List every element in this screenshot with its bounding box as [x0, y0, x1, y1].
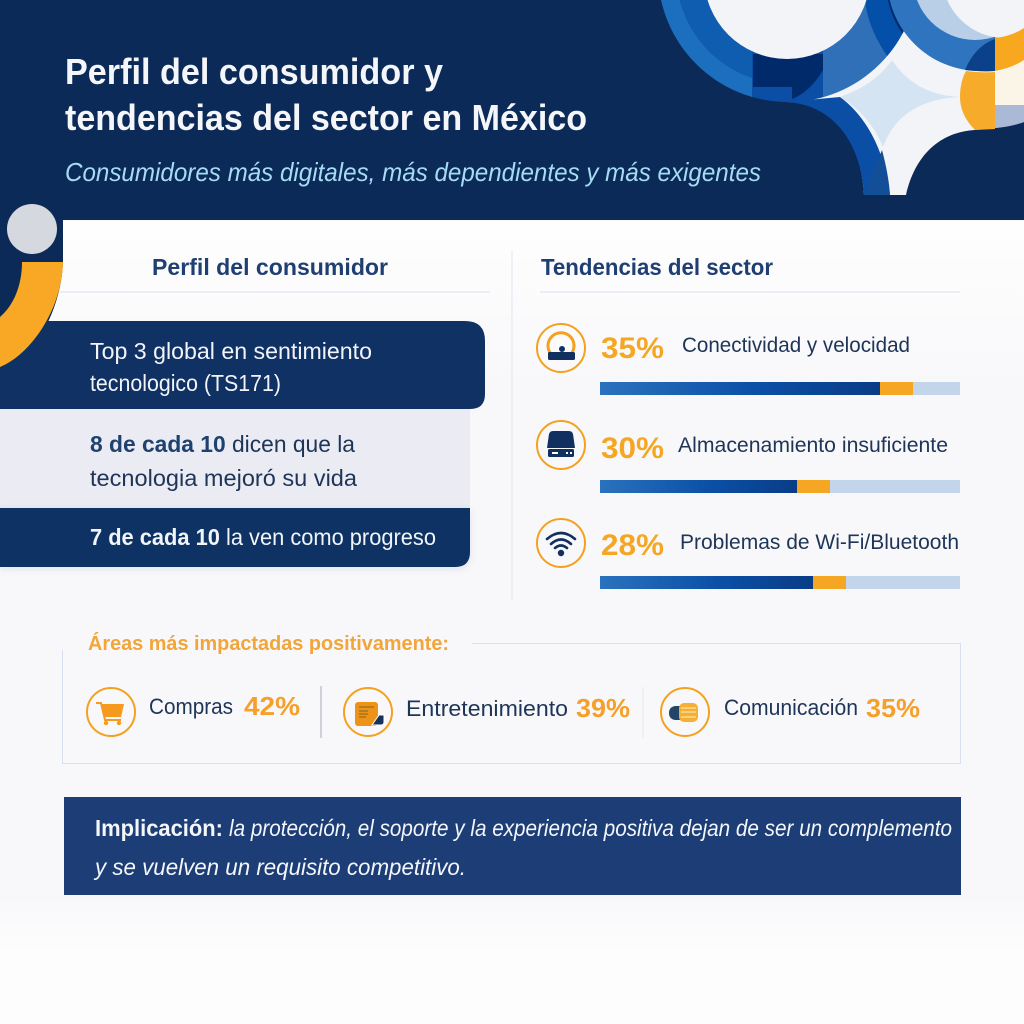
implication callout: la protección, el soporte y la experiencia positiva dejan de ser un complemento — [229, 815, 952, 841]
trend row: wifi: 28% — [601, 529, 664, 562]
trend row: connectivity: Conectividad y velocidad — [682, 333, 910, 357]
trend row: storage: Almacenamiento insuficiente — [678, 433, 948, 457]
panel: consumer profile stack — [0, 321, 485, 567]
icon: hard drive — [537, 421, 585, 469]
header band — [0, 0, 1024, 220]
area: entretenimiento — [344, 688, 630, 736]
card: top 3 global: Top 3 global en sentimiento — [90, 338, 372, 364]
area: entretenimiento: Entretenimiento — [406, 696, 568, 721]
title: tendencias del sector en México — [65, 97, 587, 138]
title: Perfil del consumidor y — [65, 51, 443, 92]
area: compras — [87, 688, 300, 736]
area: comunicación — [661, 688, 920, 736]
implication callout: y se vuelven un requisito competitivo. — [93, 854, 466, 880]
left column heading: Perfil del consumidor — [152, 254, 388, 280]
card: 8 de cada 10 — [0, 405, 470, 513]
progress bar 35% — [600, 382, 960, 395]
icon: router — [537, 324, 585, 372]
icon: wifi — [537, 519, 585, 567]
left decoration: circle and orange arc — [0, 204, 63, 367]
left navy strip — [0, 220, 63, 322]
right column heading: Tendencias del sector — [541, 254, 773, 280]
subtitle: Consumidores más digitales, más dependientes y más exigentes — [65, 157, 761, 187]
icon: note with tag — [344, 688, 392, 736]
card: 8 de cada 10: tecnologia mejoró su vida — [90, 465, 357, 491]
area: compras: Compras — [149, 694, 233, 719]
card: top 3 global — [0, 321, 485, 409]
card: 7 de cada 10: 7 de cada 10 la ven como progreso — [90, 524, 436, 550]
card: 7 de cada 10 — [0, 508, 470, 567]
trend row: wifi: Problemas de Wi-Fi/Bluetooth — [680, 530, 959, 554]
header decoration: overlapping circles — [650, 0, 1024, 195]
area: entretenimiento: 39% — [576, 693, 630, 723]
trend row: storage — [537, 421, 960, 493]
trend row: wifi — [537, 519, 960, 589]
panel heading: Áreas más impactadas positivamente: — [88, 632, 449, 655]
trend row: connectivity — [537, 324, 960, 395]
trend row: connectivity: 35% — [601, 332, 664, 365]
panel: most impacted areas — [62, 632, 960, 764]
icon: cart — [87, 688, 135, 736]
trend row: storage: 30% — [601, 432, 664, 465]
card: top 3 global: tecnologico (TS171) — [90, 370, 281, 396]
card: 8 de cada 10: 8 de cada 10 dicen que la — [90, 431, 355, 457]
implication callout — [64, 797, 961, 895]
area: comunicación: Comunicación — [724, 695, 858, 720]
area: compras: 42% — [244, 691, 300, 721]
icon: chat bubbles — [661, 688, 709, 736]
implication callout: Implicación: — [95, 815, 223, 841]
title — [65, 51, 587, 138]
progress bar 30% — [600, 480, 960, 493]
progress bar 28% — [600, 576, 960, 589]
area: comunicación: 35% — [866, 693, 920, 723]
